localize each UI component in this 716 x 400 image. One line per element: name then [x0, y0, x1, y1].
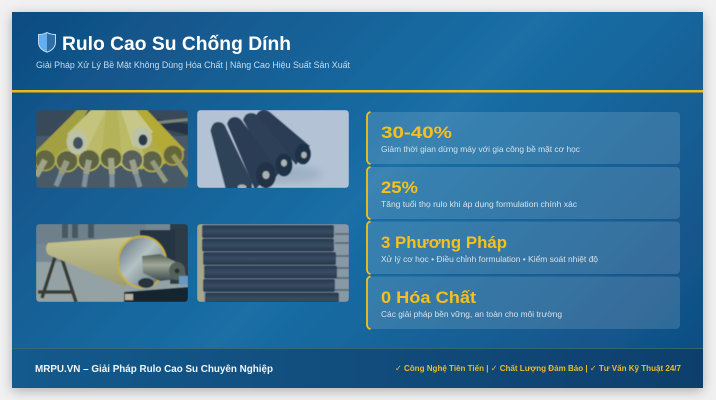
stat card: 3 Phuong Phap: [367, 222, 680, 274]
stat value: 0 Hóa Chất: [381, 288, 476, 307]
photo: yellow rollers: [34, 110, 188, 188]
stat description: Các giải pháp bền vững, an toàn cho môi trường: [381, 309, 562, 319]
stat card: 0 Hoa Chat: [367, 276, 680, 329]
stat value: 3 Phương Pháp: [381, 233, 507, 252]
subtitle: Giải Pháp Xử Lý Bề Mặt Không Dùng Hóa Chất | Nâng Cao Hiệu Suất Sản Xuất: [36, 60, 350, 71]
stat description: Giảm thời gian dừng máy với gia công bề mặt cơ học: [381, 144, 581, 154]
footer: [12, 348, 703, 388]
footer brand: MRPU.VN – Giải Pháp Rulo Cao Su Chuyên Nghiệp: [35, 363, 273, 375]
stat card: 30-40%: [367, 112, 680, 164]
stat description: Tăng tuổi thọ rulo khi áp dụng formulation chính xác: [381, 199, 578, 209]
photo: large yellow roller on stand: [36, 224, 188, 302]
stat card: 25%: [367, 167, 680, 219]
header: [36, 32, 350, 71]
stat description: Xử lý cơ học • Điều chỉnh formulation • Kiểm soát nhiệt độ: [381, 254, 598, 264]
title: Rulo Cao Su Chống Dính: [62, 33, 291, 55]
footer features: ✓ Công Nghệ Tiên Tiến | ✓ Chất Lượng Đảm Bảo | ✓ Tư Vấn Kỹ Thuật 24/7: [395, 363, 681, 373]
photo: stacked black rollers: [197, 224, 349, 306]
gold divider: [12, 90, 703, 92]
stat value: 25%: [381, 178, 418, 197]
stat value: 30-40%: [381, 123, 452, 142]
photo: black rollers on light background: [197, 110, 349, 190]
icon: shield: [38, 32, 56, 52]
